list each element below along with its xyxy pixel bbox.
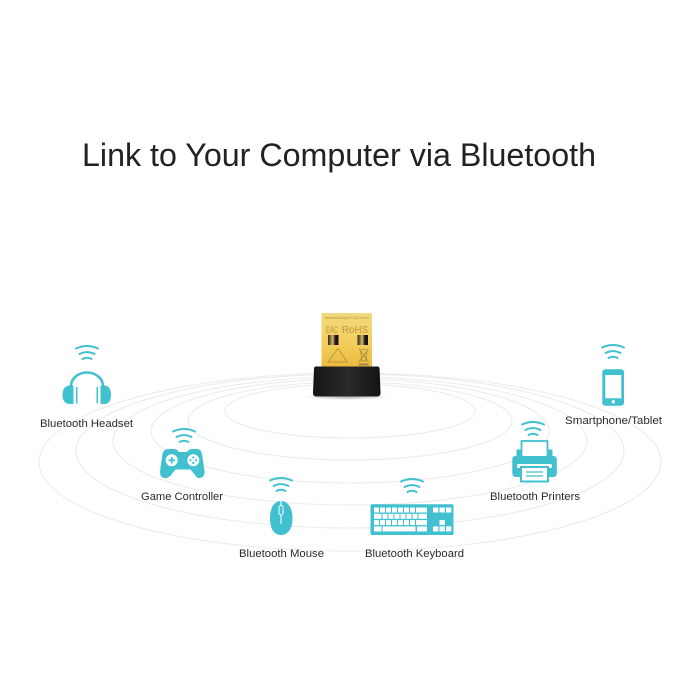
device: Game Controller: Game Controller [141,491,223,503]
icon: printer [512,441,557,482]
USB Bluetooth adapter [305,313,389,400]
icon: keyboard [370,504,454,535]
device: Bluetooth Keyboard [365,479,464,560]
icon: headset [62,372,111,404]
icon: mouse [270,501,292,535]
title: Link to Your Computer via Bluetooth [82,137,596,173]
USB Bluetooth adapter: Wireless Adapter T2UB Nano [324,316,368,320]
device: Smartphone/Tablet [565,345,662,427]
USB Bluetooth adapter: RoHS [342,324,368,336]
USB Bluetooth adapter: EAC [326,325,338,335]
gold connector [322,313,372,369]
device: Bluetooth Keyboard: Bluetooth Keyboard [365,548,464,560]
signal rings [39,373,661,551]
device: Smartphone/Tablet: Smartphone/Tablet [565,415,662,427]
device: Bluetooth Printers [490,422,581,503]
device: Bluetooth Printers: Bluetooth Printers [490,491,581,503]
device: Bluetooth Mouse: Bluetooth Mouse [239,548,324,560]
device: Game Controller [141,429,223,503]
device: Bluetooth Headset [40,346,133,430]
device: Bluetooth Mouse [239,478,324,560]
icon: smartphone [602,369,624,406]
icon: gamepad [160,449,205,478]
black housing [313,366,381,396]
device: Bluetooth Headset: Bluetooth Headset [40,418,133,430]
